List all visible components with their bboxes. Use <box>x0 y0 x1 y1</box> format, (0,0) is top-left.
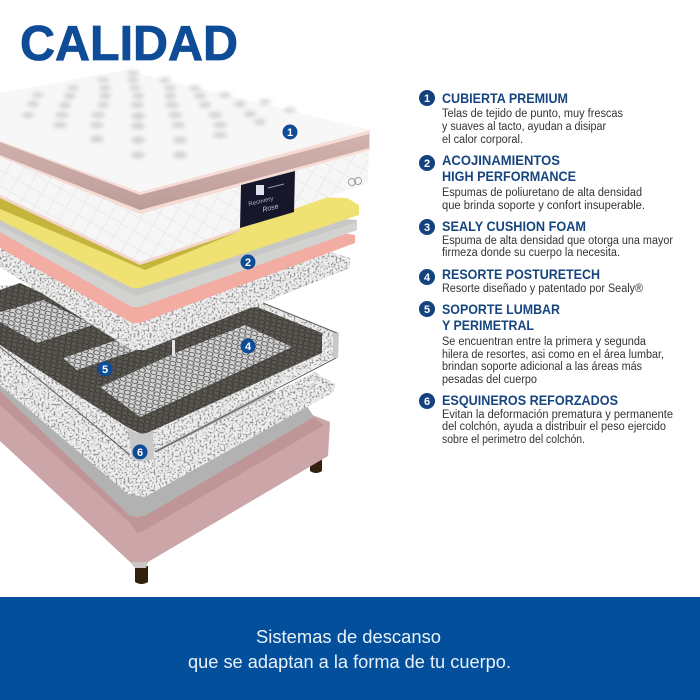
feature 2: acojinamientos: que brinda soporte y confort insuperable. <box>442 200 645 212</box>
badge 2 <box>240 254 256 270</box>
footer text: que se adaptan a la forma de tu cuerpo. <box>188 652 511 672</box>
feature 3: sealy cushion foam: 3 <box>424 222 430 234</box>
footer text: Sistemas de descanso <box>256 627 441 647</box>
badge 5 <box>98 362 112 376</box>
salmon foam layer <box>0 200 355 323</box>
feature 2: acojinamientos: ACOJINAMIENTOS <box>442 152 560 168</box>
badge 4: 4 <box>245 341 252 353</box>
badge 2: 2 <box>245 257 251 269</box>
product label <box>240 171 295 228</box>
feature 1: cubierta premium <box>419 90 623 146</box>
feature 4: resorte posturetech: 4 <box>424 272 431 284</box>
feature list <box>419 90 673 446</box>
feature 2: acojinamientos: Espumas de poliuretano de alta densidad <box>442 187 642 199</box>
feature 5: soporte lumbar: brindan soporte adicional a las áreas más <box>442 361 642 373</box>
feature 5: soporte lumbar <box>419 301 664 386</box>
title: CALIDAD <box>20 17 238 71</box>
feature 3: sealy cushion foam: SEALY CUSHION FOAM <box>442 218 586 234</box>
feature 6: esquineros reforzados: Evitan la deformación prematura y permanente <box>442 409 673 421</box>
grey foam layer <box>0 200 357 307</box>
feature 2: acojinamientos: 2 <box>424 158 430 170</box>
yellow foam layer <box>0 190 359 288</box>
lower foam layer <box>0 345 335 497</box>
feature 5: soporte lumbar: SOPORTE LUMBAR <box>442 301 560 317</box>
feature 5: soporte lumbar: hilera de resortes, asi como en el área lumbar, <box>442 349 664 361</box>
icon: care symbols <box>348 178 362 186</box>
feature 6: esquineros reforzados: sobre el perimetro del colchón. <box>442 434 585 446</box>
feature 5: soporte lumbar: Se encuentran entre la primera y segunda <box>442 336 647 348</box>
feature 3: sealy cushion foam: firmeza donde su cuerpo la necesita. <box>442 247 620 259</box>
feature 6: esquineros reforzados: ESQUINEROS REFORZADOS <box>442 392 618 408</box>
feature 1: cubierta premium: Telas de tejido de punto, muy frescas <box>442 108 623 120</box>
badge 1: 1 <box>287 127 293 139</box>
badge 6 <box>132 444 148 460</box>
feature 6: esquineros reforzados <box>419 392 673 446</box>
feature 5: soporte lumbar: 5 <box>424 304 430 316</box>
feature 5: soporte lumbar: pesadas del cuerpo <box>442 374 537 386</box>
bed base <box>0 350 330 568</box>
feature 1: cubierta premium: 1 <box>424 93 430 105</box>
quilted tufts <box>22 70 296 158</box>
footer band <box>0 597 700 700</box>
feature 1: cubierta premium: el calor corporal. <box>442 134 523 146</box>
icon: bed base legs <box>135 458 322 584</box>
spring unit <box>0 283 339 458</box>
feature 6: esquineros reforzados: del colchón, ayuda a distribuir el peso ejercido <box>442 421 666 433</box>
reinforced corner piece <box>128 428 154 462</box>
feature 2: acojinamientos <box>419 152 645 212</box>
feature 4: resorte posturetech: RESORTE POSTURETECH <box>442 266 600 282</box>
feature 1: cubierta premium: y suaves al tacto, ayudan a disipar <box>442 121 606 133</box>
footer text <box>188 627 511 672</box>
badge 4 <box>240 338 256 354</box>
product label: Recovery <box>248 196 274 208</box>
feature 1: cubierta premium: CUBIERTA PREMIUM <box>442 90 568 106</box>
product label: Rose <box>262 203 279 214</box>
upper foam layer <box>0 200 350 350</box>
feature 4: resorte posturetech <box>419 266 643 295</box>
mattress layers <box>0 70 370 584</box>
feature 5: soporte lumbar: Y PERIMETRAL <box>442 317 534 333</box>
feature 2: acojinamientos: HIGH PERFORMANCE <box>442 168 576 184</box>
feature 4: resorte posturetech: Resorte diseñado y patentado por Sealy® <box>442 283 643 295</box>
feature 3: sealy cushion foam <box>419 218 673 259</box>
badge 1 <box>282 124 298 140</box>
mattress exploded diagram <box>0 70 370 584</box>
badge 6: 6 <box>137 447 143 459</box>
mattress body <box>0 70 370 265</box>
feature 3: sealy cushion foam: Espuma de alta densidad que otorga una mayor <box>442 235 673 247</box>
badge 5: 5 <box>102 364 108 376</box>
feature 6: esquineros reforzados: 6 <box>424 396 430 408</box>
